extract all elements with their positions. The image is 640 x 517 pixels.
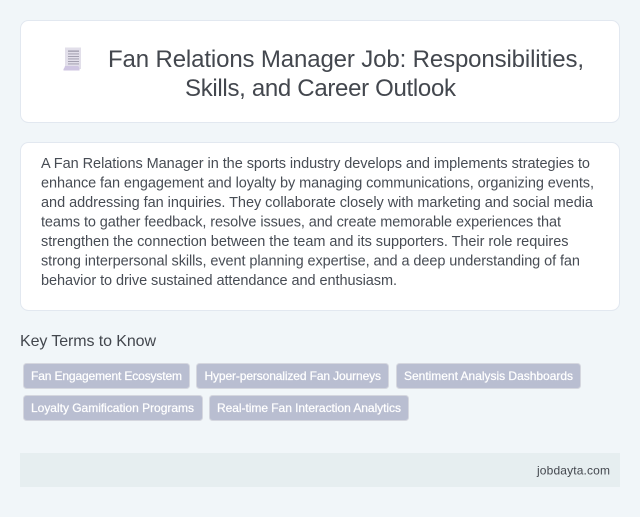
title: Skills, and Career Outlook <box>185 75 457 102</box>
text block: description: A Fan Relations Manager in the sports industry develops and implements strategies to <box>41 156 590 172</box>
chip: Sentiment Analysis Dashboards: Sentiment Analysis Dashboards <box>404 369 573 383</box>
text block: description: behavior to drive sustained attendance and enthusiasm. <box>41 273 397 289</box>
text block: description: teams to gather feedback, resolve issues, and create memorable experiences that <box>41 214 561 230</box>
text block: description: enhance fan engagement and loyalty by managing communications, organizing events, <box>41 176 594 192</box>
text block: description: strong interpersonal skills, event planning expertise, and a deep understanding of fan <box>41 254 580 270</box>
title <box>108 46 584 102</box>
heading: key terms: Key Terms to Know <box>20 333 156 350</box>
chip: Hyper-personalized Fan Journeys <box>196 364 388 388</box>
chip: Fan Engagement Ecosystem <box>24 364 190 388</box>
text block: description: and addressing fan inquiries. They collaborate closely with marketing and social media <box>41 195 594 211</box>
footer <box>20 453 620 487</box>
footer: jobdayta.com <box>536 464 610 478</box>
title: Fan Relations Manager Job: Responsibilities, <box>108 46 584 73</box>
chip: Hyper-personalized Fan Journeys: Hyper-personalized Fan Journeys <box>204 369 381 383</box>
chip: Real-time Fan Interaction Analytics <box>210 396 408 420</box>
text block: description: strengthen the connection between the team and its supporters. Their role requires <box>41 234 568 250</box>
panel: description <box>20 142 620 310</box>
icon: document scroll <box>64 48 81 70</box>
chip: Loyalty Gamification Programs <box>24 396 202 420</box>
text block: description <box>41 156 594 289</box>
chip: Real-time Fan Interaction Analytics: Real-time Fan Interaction Analytics <box>217 401 401 415</box>
chip: Fan Engagement Ecosystem: Fan Engagement Ecosystem <box>31 369 182 383</box>
chip: Loyalty Gamification Programs: Loyalty Gamification Programs <box>31 401 194 415</box>
panel: title card <box>20 20 620 122</box>
chip: Sentiment Analysis Dashboards <box>396 364 580 388</box>
